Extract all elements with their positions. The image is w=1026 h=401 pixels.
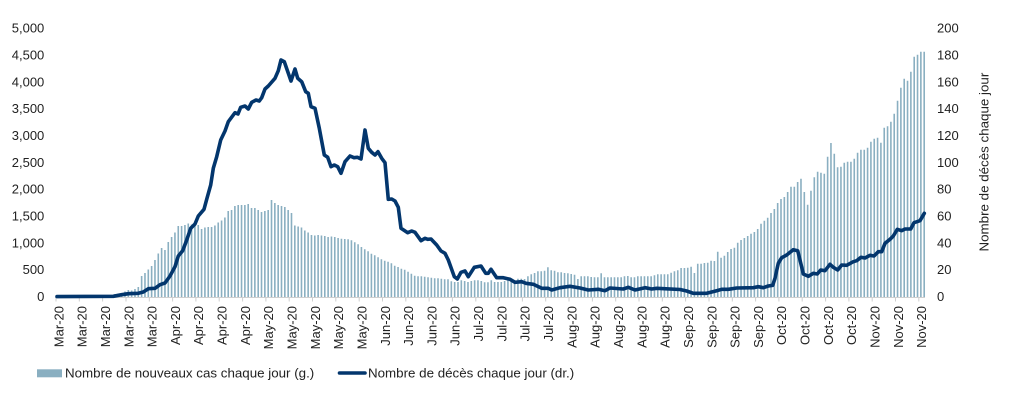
x axis date labels: Aug-20 [658,306,673,348]
x axis date labels: Jun-20 [378,306,393,346]
x axis date labels: Oct-20 [821,306,836,345]
x axis date labels: Sep-20 [704,306,719,348]
right y axis labels: 80 [937,182,951,197]
right y axis labels: 0 [937,289,944,304]
legend item: deaths: Nombre de décès chaque jour (dr.) [368,366,574,380]
x axis date labels: Apr-20 [214,306,230,345]
x axis date labels [51,306,929,349]
right y axis labels: 180 [937,48,959,62]
left y axis labels: 4,500 [12,48,44,62]
x axis date labels: Nov-20 [914,306,929,348]
x axis date labels: May-20 [331,306,346,349]
x axis date labels: Nov-20 [868,306,882,348]
left y axis labels: 3,500 [12,101,44,116]
x axis date labels: Jul-20 [494,306,509,341]
x axis line and ticks [56,298,925,302]
x axis date labels: Jul-20 [541,306,556,341]
legend item: new cases: Nombre de nouveaux cas chaque jour (g.) [65,366,314,380]
legend [37,366,574,380]
right y axis labels: 20 [937,262,951,277]
left y axis labels [12,21,44,304]
line: deaths per day [57,60,924,297]
x axis date labels: Mar-20 [75,306,90,347]
left y axis labels: 2,000 [12,182,44,197]
x axis date labels: Oct-20 [774,306,789,345]
right y axis labels: 100 [937,155,959,170]
x axis date labels: Jul-20 [471,306,486,341]
right y axis labels: 160 [937,74,959,89]
x axis date labels: May-20 [308,306,323,349]
x axis date labels: Mar-20 [121,306,136,347]
bars: new cases per day [115,52,924,297]
right y axis labels: 60 [937,208,951,224]
x axis date labels: Mar-20 [98,306,113,347]
right y axis labels: 140 [937,101,959,116]
x axis date labels: Jul-20 [518,306,533,341]
x axis date labels: Sep-20 [728,306,743,348]
x axis date labels: Aug-20 [634,306,649,348]
x axis date labels: Jun-20 [401,306,416,346]
x axis date labels: Apr-20 [238,306,253,345]
right y axis labels: 40 [937,235,951,250]
x axis date labels: Sep-20 [681,306,696,348]
x axis date labels: Mar-20 [51,306,66,347]
left y axis labels: 4,000 [12,74,44,89]
left y axis labels: 2,500 [12,155,44,170]
x axis date labels: Sep-20 [751,306,766,348]
right y axis labels: 200 [937,21,959,36]
right y axis labels: 120 [937,128,959,143]
left y axis labels: 1,500 [12,208,44,224]
x axis date labels: Aug-20 [564,306,579,348]
x axis date labels: Nov-20 [891,306,906,348]
x axis date labels: Jun-20 [424,306,439,346]
left y axis labels: 500 [23,262,44,277]
x axis date labels: Oct-20 [798,306,812,345]
x axis date labels: Jun-20 [448,306,463,346]
x axis date labels: Aug-20 [588,306,603,348]
x axis date labels: Oct-20 [844,306,859,345]
x axis date labels: May-20 [354,306,370,349]
right y axis labels [937,21,959,304]
left y axis labels: 1,000 [12,235,44,250]
left y axis labels: 3,000 [12,128,44,143]
x axis date labels: May-20 [261,306,276,349]
x axis date labels: Aug-20 [611,306,626,348]
x axis date labels: Apr-20 [168,306,183,345]
right y axis title: Nombre de décès chaque jour [976,72,992,252]
x axis date labels: Mar-20 [145,306,160,347]
left y axis labels: 0 [37,289,44,304]
x axis date labels: Apr-20 [191,306,206,345]
x axis date labels: May-20 [284,306,300,349]
left y axis labels: 5,000 [12,21,44,36]
